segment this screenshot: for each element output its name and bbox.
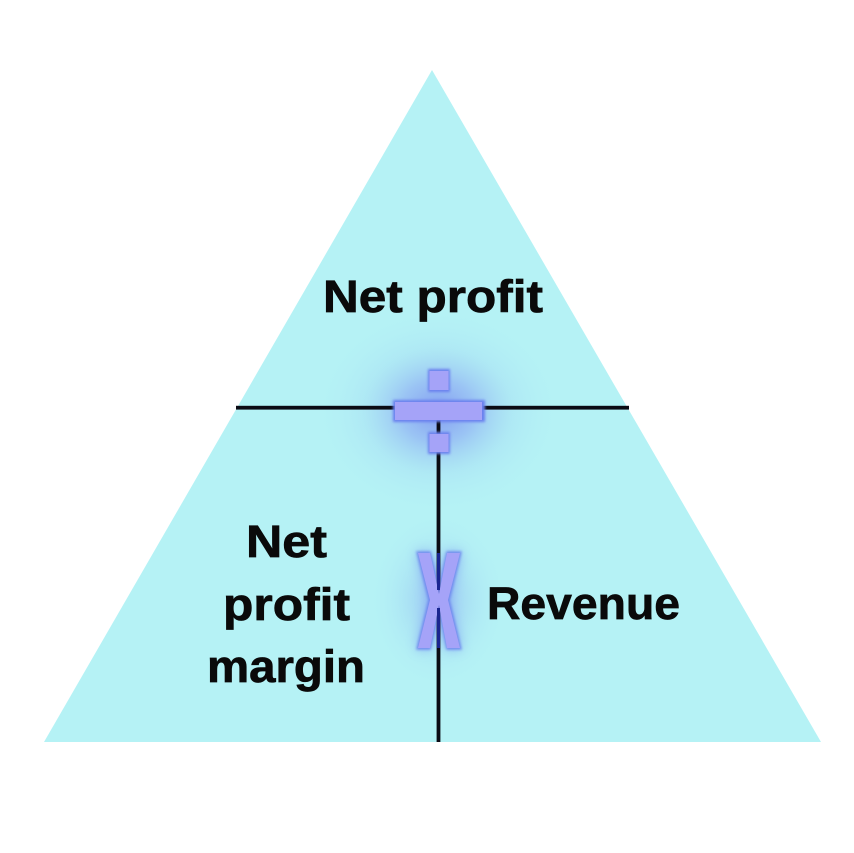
glow behind operators (313, 306, 563, 690)
label: net profit margin: Net (246, 516, 327, 567)
label: net profit margin (207, 516, 365, 692)
label: net profit: Net profit (323, 271, 543, 322)
vertical divider line (437, 420, 440, 742)
label: revenue: Revenue (487, 578, 680, 629)
label: net profit margin: margin (207, 641, 365, 692)
icon: multiplication sign (417, 552, 461, 649)
triangle background (44, 70, 821, 742)
icon: division sign (393, 369, 485, 454)
dark line seen through the notches (437, 553, 440, 648)
label: net profit margin: profit (223, 579, 350, 630)
horizontal divider line (236, 406, 629, 410)
